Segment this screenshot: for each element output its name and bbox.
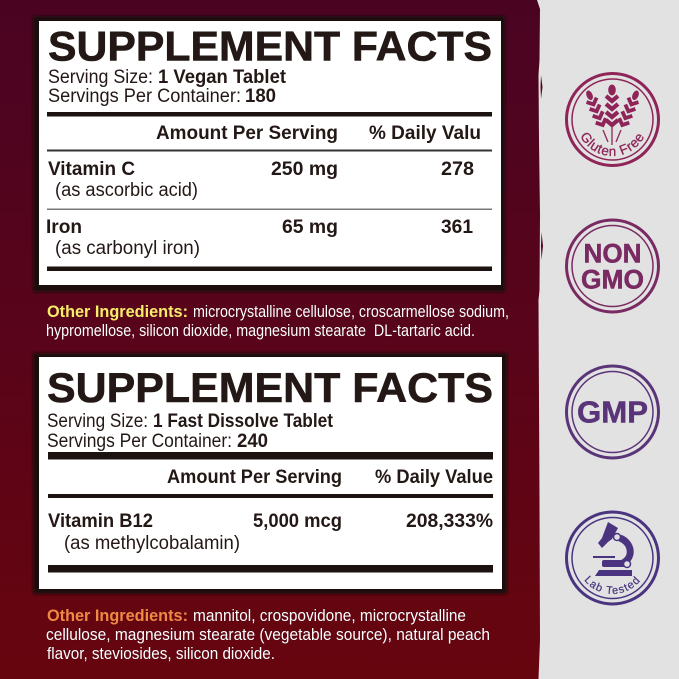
- row: vitamin C: 278: [441, 159, 474, 180]
- row: iron: [46, 217, 473, 259]
- servings per container: Servings Per Container:: [48, 86, 241, 107]
- badge text: gluten free: Gluten Free: [582, 132, 644, 156]
- servings per container: Servings Per Container:: [47, 431, 232, 452]
- other ingredients, tablet one: Other Ingredients:: [47, 303, 188, 321]
- column heading: amount: Amount Per Serving: [167, 467, 342, 488]
- row: vitamin B12: [48, 511, 493, 554]
- row: vitamin C: 250 mg: [271, 159, 338, 180]
- icon: wheat: [582, 84, 643, 145]
- background: dark red torn panel: [0, 0, 540, 679]
- row: vitamin C: Vitamin C: [48, 159, 135, 180]
- other ingredients, tablet two: Other Ingredients:: [47, 607, 188, 625]
- badge: GMP: GMP: [577, 394, 648, 430]
- other ingredients, tablet one: [46, 303, 509, 340]
- column heading: daily value: % Daily Value: [375, 467, 493, 488]
- row: vitamin B12: 5,000 mcg: [253, 511, 342, 532]
- row: vitamin C: [48, 159, 474, 201]
- heading: supplement facts: SUPPLEMENT FACTS: [47, 364, 493, 411]
- servings per container: 240: [237, 431, 268, 452]
- row: iron: 65 mg: [282, 217, 338, 238]
- other ingredients, tablet two: [46, 607, 490, 663]
- badge: non GMO: GMO: [581, 264, 644, 294]
- badge: non GMO: NON: [584, 238, 642, 268]
- other ingredients, tablet two: cellulose, magnesium stearate (vegetable source), natural peach: [46, 626, 490, 644]
- other ingredients, tablet one: microcrystalline cellulose, croscarmellose sodium,: [193, 303, 509, 321]
- other ingredients, tablet two: flavor, steviosides, silicon dioxide.: [47, 645, 275, 663]
- serving size: 1 Vegan Tablet: [158, 67, 287, 88]
- serving size: [48, 67, 287, 88]
- badge: GMP: [566, 366, 658, 458]
- row: vitamin B12: 208,333%: [406, 511, 493, 532]
- column heading: daily value: % Daily Valu: [369, 123, 481, 144]
- row: vitamin C: (as ascorbic acid): [55, 180, 198, 201]
- serving size: Serving Size:: [47, 411, 148, 432]
- torn edge slivers: [540, 75, 543, 260]
- servings per container: 180: [245, 86, 276, 107]
- other ingredients, tablet one: hypromellose, silicon dioxide, magnesium stearate DL-tartaric acid.: [46, 322, 475, 340]
- serving size: [47, 411, 334, 432]
- row: iron: Iron: [46, 217, 82, 238]
- row: iron: (as carbonyl iron): [55, 238, 200, 259]
- badge text: lab tested: Lab Tested: [584, 576, 640, 594]
- panel: supplement facts, tablet two: [33, 353, 507, 594]
- badge: non GMO: [566, 220, 658, 312]
- icon: microscope: [593, 522, 632, 576]
- panel: supplement facts, tablet one: [33, 16, 505, 292]
- serving size: Serving Size:: [48, 67, 153, 88]
- badge: lab tested: [565, 510, 660, 606]
- other ingredients, tablet two: mannitol, crospovidone, microcrystalline: [193, 607, 466, 625]
- row: vitamin B12: Vitamin B12: [48, 511, 153, 532]
- badge: gluten free: [565, 72, 660, 167]
- row: vitamin B12: (as methylcobalamin): [64, 533, 240, 554]
- column heading: amount: Amount Per Serving: [156, 123, 338, 144]
- row: iron: 361: [441, 217, 473, 238]
- heading: supplement facts: SUPPLEMENT FACTS: [48, 22, 492, 70]
- serving size: 1 Fast Dissolve Tablet: [153, 411, 334, 432]
